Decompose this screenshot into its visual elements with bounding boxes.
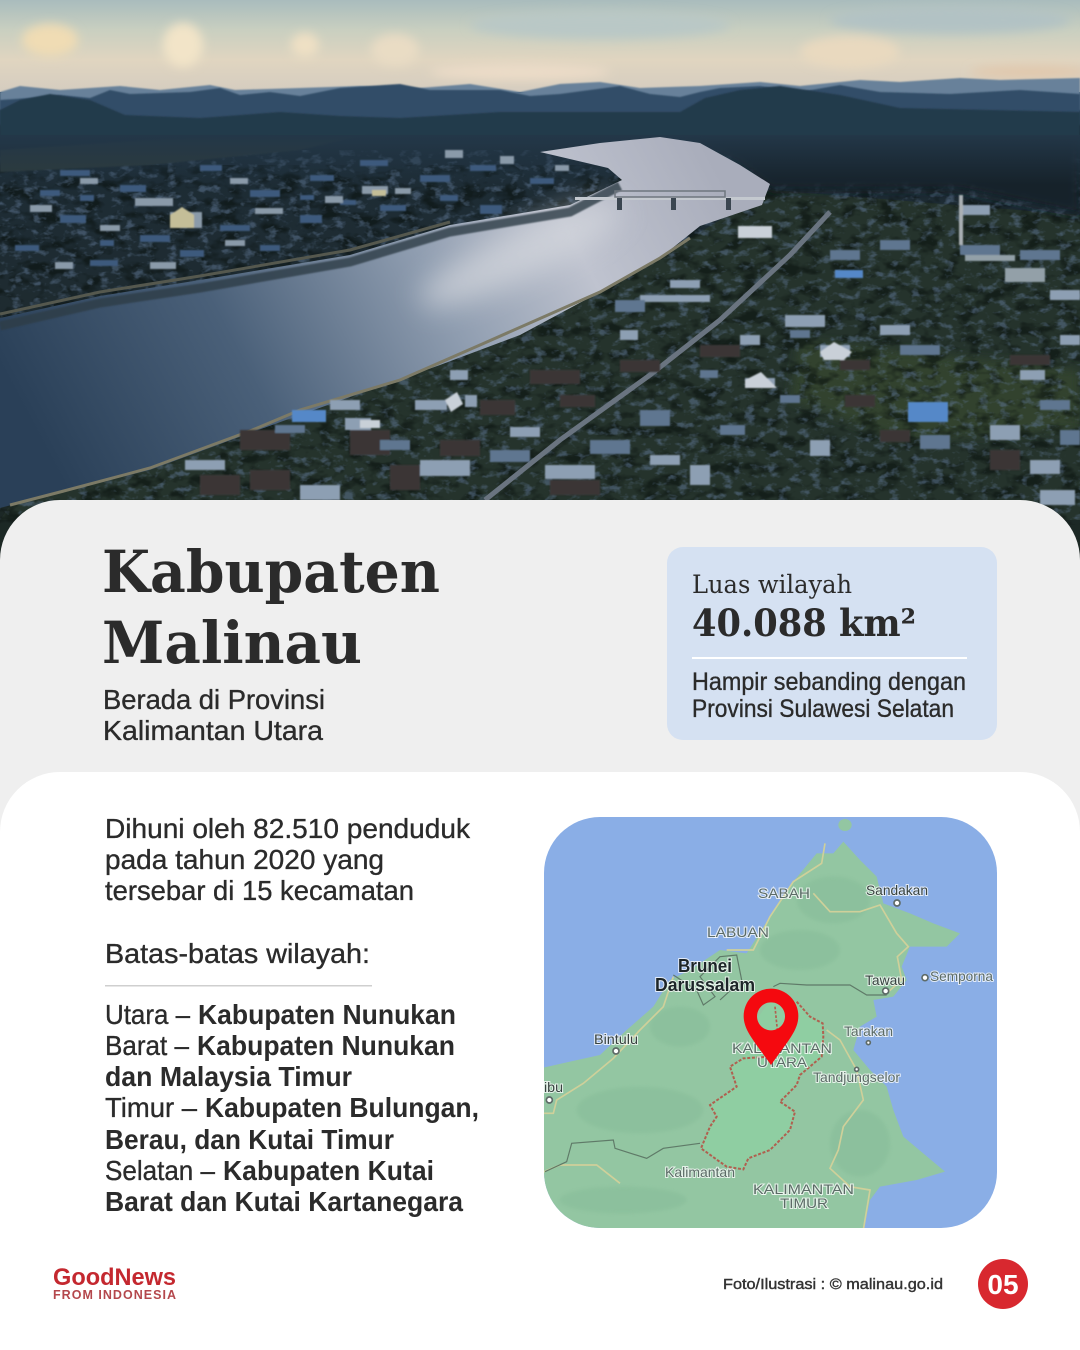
population text [105, 813, 471, 906]
far mountains [0, 78, 1080, 110]
borders list: Barat – [105, 1030, 189, 1061]
subtitle: Kalimantan Utara [103, 715, 323, 746]
near mountains [0, 84, 1080, 125]
city dots [546, 900, 928, 1103]
town texture [0, 150, 1080, 525]
haze [0, 135, 1080, 176]
map labels: Tandjungselor [813, 1069, 900, 1085]
roads [540, 843, 908, 1230]
map [540, 817, 997, 1230]
right town houses [185, 195, 1080, 505]
dotted district border [701, 1002, 823, 1169]
map labels: SABAH [758, 885, 810, 901]
callout: area: Hampir sebanding dengan [692, 668, 966, 696]
callout: area: 40.088 km² [692, 601, 916, 645]
borders list: Timur – [105, 1092, 197, 1123]
bridge [575, 191, 765, 210]
map labels: Tarakan [844, 1023, 893, 1039]
title: Malinau [102, 609, 362, 677]
logo: GoodNews from Indonesia: FROM INDONESIA [53, 1288, 176, 1302]
map labels: LABUAN [707, 924, 769, 940]
borders list: Berau, dan Kutai Timur [105, 1124, 394, 1155]
map labels: UTARA [757, 1054, 808, 1070]
map labels [544, 882, 993, 1211]
map labels: KALIMANTAN [732, 1040, 832, 1056]
title: Kabupaten [102, 538, 440, 606]
right forest [717, 150, 1080, 218]
map labels: Tawau [865, 972, 905, 988]
river [0, 137, 770, 508]
callout: area: Provinsi Sulawesi Selatan [692, 695, 954, 723]
borders list: Barat dan Kutai Kartanegara [105, 1186, 463, 1217]
callout: area [667, 547, 997, 740]
left town houses [15, 150, 569, 269]
page number [978, 1259, 1028, 1309]
borders list: Kabupaten Bulungan, [205, 1092, 479, 1123]
population text: Dihuni oleh 82.510 penduduk [105, 813, 471, 844]
land mass [540, 842, 960, 1230]
map labels: Semporna [930, 968, 993, 984]
sky [0, 0, 1080, 100]
borders list: Kabupaten Nunukan [198, 999, 456, 1030]
road [485, 212, 830, 500]
icon: location pin [744, 989, 798, 1065]
page number: 05 [987, 1269, 1019, 1300]
left bank tan [0, 222, 450, 314]
photo credit: Foto/Ilustrasi : © malinau.go.id [723, 1276, 943, 1293]
subtitle [103, 684, 325, 746]
logo: GoodNews from Indonesia: GoodNews [53, 1264, 176, 1291]
borders list: Selatan – [105, 1155, 215, 1186]
map labels: ibu [544, 1079, 563, 1095]
map labels: Darussalam [655, 975, 755, 995]
bank strip [10, 238, 690, 505]
aerial photo: river town [0, 0, 1080, 572]
map labels: Brunei [678, 956, 732, 976]
map labels: TIMUR [780, 1195, 828, 1211]
borders heading: Batas-batas wilayah: [105, 938, 370, 969]
map labels: Kalimantan [665, 1164, 735, 1180]
borders list: Kabupaten Nunukan [197, 1030, 455, 1061]
callout: area: Luas wilayah [692, 570, 852, 599]
map labels: Bintulu [594, 1031, 638, 1047]
map labels: KALIMANTAN [753, 1181, 854, 1197]
land base [0, 92, 1080, 572]
country border [545, 955, 887, 1172]
right town green [0, 190, 1080, 520]
population text: pada tahun 2020 yang [105, 844, 384, 875]
borders list [105, 999, 479, 1217]
Malinau region fill [701, 997, 823, 1169]
borders list: dan Malaysia Timur [105, 1061, 352, 1092]
borders list: Utara – [105, 999, 190, 1030]
population text: tersebar di 15 kecamatan [105, 875, 414, 906]
bank reflection [0, 186, 620, 326]
far left plain [0, 150, 276, 172]
subtitle: Berada di Provinsi [103, 684, 325, 715]
panel: details section [0, 772, 1080, 1228]
borders list: Kabupaten Kutai [223, 1155, 434, 1186]
panel: title section [0, 500, 1080, 1000]
title [102, 538, 440, 677]
map labels: Sandakan [866, 882, 928, 898]
terrain patches [560, 877, 890, 1213]
